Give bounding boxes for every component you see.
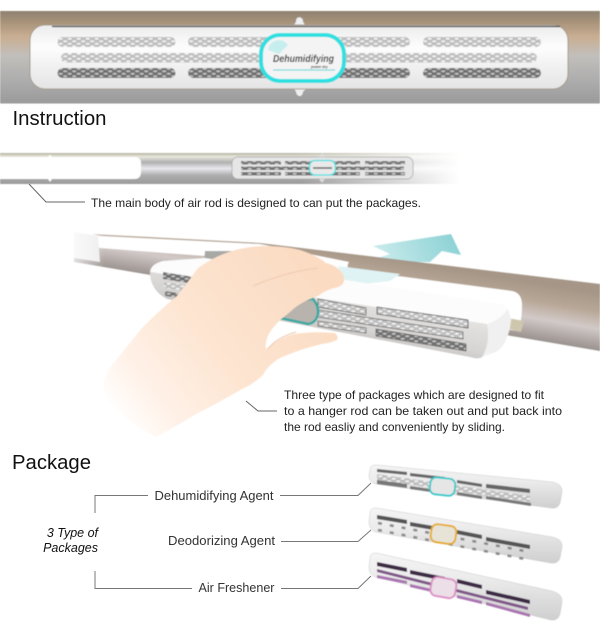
badge in hand xyxy=(280,299,318,324)
leader line: packages note xyxy=(246,401,277,411)
left end of rod xyxy=(74,232,100,262)
package plate xyxy=(30,17,568,96)
text: main body note: The main body of air rod is designed to can put the packages. xyxy=(91,196,421,210)
text: sliding note: the rod easliy and conveniently by sliding. xyxy=(284,420,505,434)
badge: Dehumidifying: Dehumidifying xyxy=(273,53,334,65)
package: air freshener xyxy=(369,553,562,620)
heading: Instruction: Instruction xyxy=(12,108,106,130)
hanger rod with arrow and package xyxy=(60,222,600,437)
package: deodorizing xyxy=(369,508,562,563)
text: sliding note xyxy=(284,388,562,434)
rod cross view with empty slot xyxy=(0,153,460,184)
bracket lines xyxy=(95,483,371,588)
label: Deodorizing Agent: Deodorizing Agent xyxy=(168,534,276,548)
label: 3 Type of Packages: Packages xyxy=(43,541,98,555)
label: 3 Type of Packages xyxy=(43,526,100,555)
rod xyxy=(74,233,600,351)
top rod with dehumidifying package xyxy=(0,11,600,104)
heading: Package: Package xyxy=(12,452,91,474)
icon: hand xyxy=(104,246,344,437)
package xyxy=(150,258,511,358)
label: 3 Type of Packages: 3 Type of xyxy=(47,526,100,540)
arrow head behind rod xyxy=(365,234,461,262)
white slot in rod xyxy=(60,225,522,331)
label: Air Freshener: Air Freshener xyxy=(198,581,274,595)
arrow tail in slot xyxy=(338,266,400,286)
badge: Dehumidifying xyxy=(261,35,344,81)
empty slot xyxy=(0,154,141,182)
leader line: main body xyxy=(29,184,85,202)
text: sliding note: to a hanger rod can be taken out and put back into xyxy=(284,404,562,418)
small package xyxy=(232,153,413,183)
text: sliding note: Three type of packages which are designed to fit xyxy=(284,388,545,402)
package: dehumidifying xyxy=(369,465,562,508)
label: Dehumidifying Agent: Dehumidifying Agent xyxy=(154,489,274,503)
badge: Dehumidifying: power dry xyxy=(310,65,329,69)
